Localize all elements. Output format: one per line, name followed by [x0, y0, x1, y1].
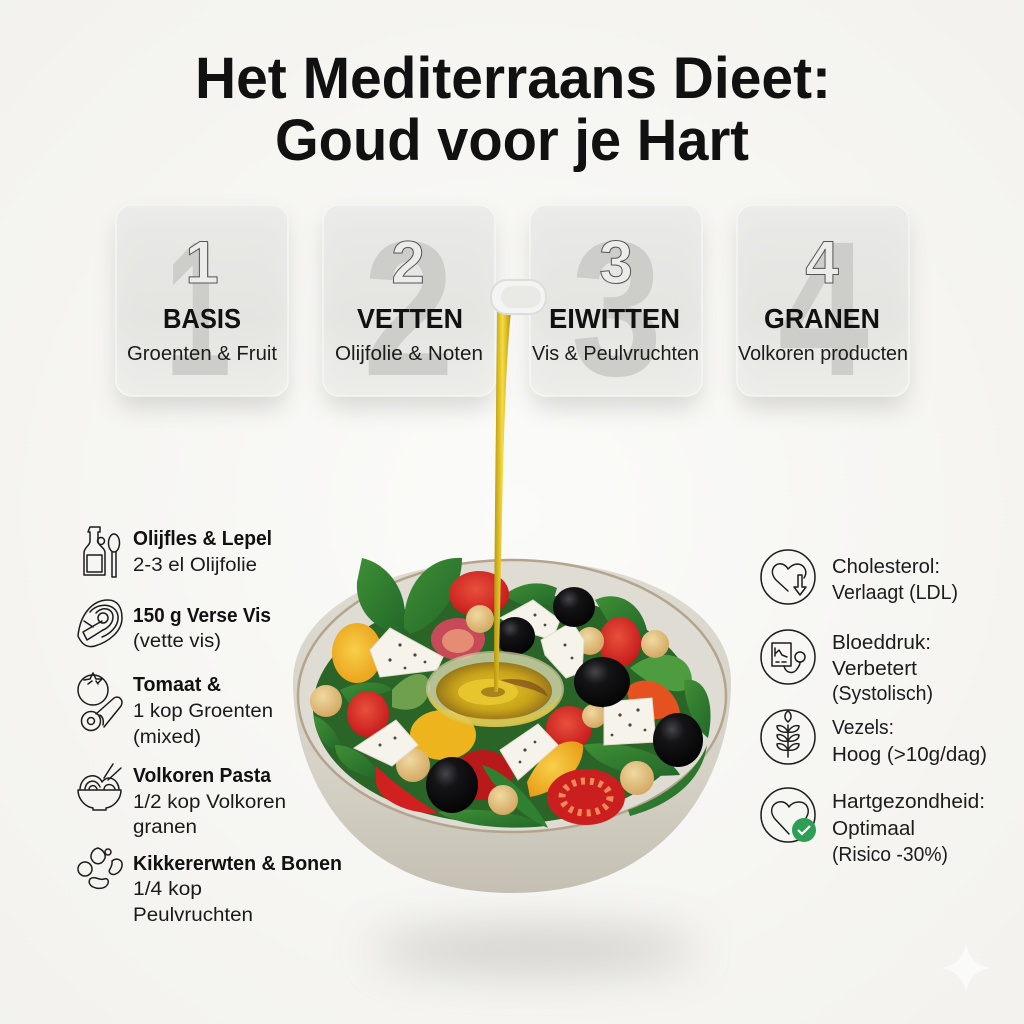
text: tomaat: (mixed) — [133, 727, 201, 748]
icon: oil bottle and spoon — [84, 527, 120, 577]
chickpeas — [310, 605, 669, 815]
text: vis — [133, 605, 271, 652]
icon: pasta bowl — [78, 764, 121, 810]
panel: card 2 VETTEN: 2 — [391, 229, 425, 296]
leaves — [314, 558, 711, 828]
panel: card 2 VETTEN: Olijfolie & Noten — [335, 343, 483, 365]
text: vezels: Vezels: — [832, 716, 894, 739]
text: hartgezondheid: Hartgezondheid: — [832, 790, 985, 813]
bowl body — [293, 560, 731, 893]
list: health benefits — [761, 550, 987, 866]
title: Het Mediterraans Dieet: — [195, 46, 831, 111]
text: pasta: Volkoren Pasta — [133, 765, 272, 787]
panel: card 4 GRANEN: 4 — [805, 229, 839, 296]
panel: card 4 GRANEN: GRANEN — [764, 303, 880, 334]
feta cubes — [354, 600, 656, 780]
text: bloeddruk: Bloeddruk: — [832, 631, 931, 654]
panel: card 3 EIWITTEN — [530, 201, 702, 416]
text: vezels: Hoog (>10g/dag) — [832, 743, 987, 766]
text: hartgezondheid — [832, 790, 985, 866]
panel: card 3 EIWITTEN: 3 — [571, 201, 662, 416]
illustration: salad bowl — [293, 558, 731, 893]
panel: card 3 EIWITTEN: Vis & Peulvruchten — [532, 343, 699, 365]
leaf strip over tomato — [482, 765, 548, 828]
text: vezels — [832, 716, 987, 766]
text: cholesterol: Verlaagt (LDL) — [832, 581, 958, 604]
icon: sparkle watermark — [942, 944, 990, 992]
text: peulvruchten: Peulvruchten — [133, 905, 253, 926]
text: pasta — [133, 765, 286, 838]
oil stream with spout — [491, 280, 546, 692]
panel: card 1 BASIS: 1 — [165, 201, 231, 416]
title — [195, 46, 831, 173]
text: olijfles: 2-3 el Olijfolie — [133, 555, 257, 576]
tomatoes — [332, 571, 680, 825]
text: vis: 150 g Verse Vis — [133, 605, 271, 627]
icon: bowl floor shadow — [370, 930, 700, 970]
text: cholesterol: Cholesterol: — [832, 555, 940, 578]
icon: tomato and cucumber — [78, 673, 122, 730]
panel: card 4 GRANEN: 4 — [778, 201, 869, 416]
text: bloeddruk — [832, 631, 933, 705]
text: peulvruchten: 1/4 kop — [133, 879, 202, 900]
icon: blood pressure monitor — [761, 630, 815, 684]
text: bloeddruk: Verbetert — [832, 657, 917, 680]
text: olijfles: Olijfles & Lepel — [133, 528, 272, 550]
text: tomaat — [133, 674, 273, 748]
text: bloeddruk: (Systolisch) — [832, 682, 933, 705]
text: peulvruchten — [133, 853, 342, 926]
text: pasta: 1/2 kop Volkoren — [133, 792, 286, 813]
panel: card 4 GRANEN: Volkoren producten — [738, 343, 908, 365]
panel: card 3 EIWITTEN: EIWITTEN — [549, 303, 680, 334]
panel: card 1 BASIS: BASIS — [163, 303, 241, 334]
bowl inner wall — [298, 560, 726, 832]
icon: heart with arrow down — [761, 550, 815, 604]
panel: card 2 VETTEN — [323, 201, 495, 416]
title: Goud voor je Hart — [275, 108, 749, 173]
text: peulvruchten: Kikkererwten & Bonen — [133, 853, 342, 875]
panel: card 1 BASIS: 1 — [185, 229, 219, 296]
text: pasta: granen — [133, 817, 197, 838]
panel: card 4 GRANEN — [737, 201, 909, 416]
list: ingredients — [78, 527, 342, 926]
text: hartgezondheid: Optimaal — [832, 817, 915, 840]
feta pepper — [378, 614, 646, 763]
text: tomaat: Tomaat & — [133, 674, 221, 696]
text: olijfles — [133, 528, 272, 576]
icon: wheat — [761, 710, 815, 764]
icon: salmon steak — [78, 600, 122, 647]
icon: heart with green check — [761, 788, 816, 842]
text: cholesterol — [832, 555, 958, 604]
panel: card 2 VETTEN: 2 — [363, 201, 454, 416]
text: vis: (vette vis) — [133, 631, 221, 652]
panel: card 1 BASIS: Groenten & Fruit — [127, 343, 277, 365]
panel: card 1 BASIS — [116, 201, 288, 416]
panel: card 2 VETTEN: VETTEN — [357, 303, 463, 334]
icon: chickpeas and beans — [78, 848, 122, 888]
panel: card 3 EIWITTEN: 3 — [599, 229, 633, 296]
glass dish with olive oil — [427, 652, 563, 727]
text: tomaat: 1 kop Groenten — [133, 701, 273, 722]
text: hartgezondheid: (Risico -30%) — [832, 843, 948, 866]
olives — [426, 587, 703, 813]
